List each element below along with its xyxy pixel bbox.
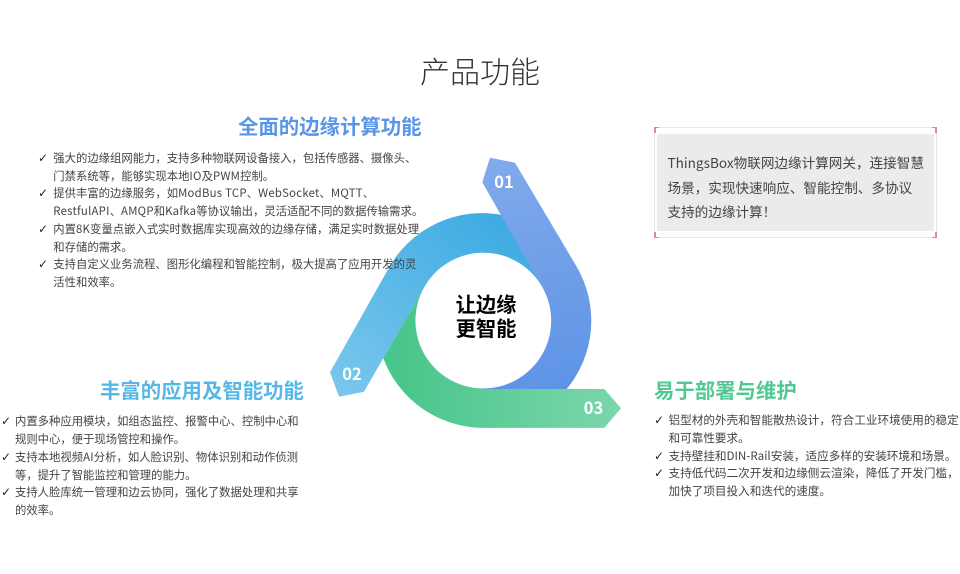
text block: deployment list: ✓ <box>654 466 664 480</box>
center label: 更智能 <box>456 312 516 342</box>
center label <box>456 288 516 342</box>
text block: deployment list: ✓ <box>654 413 664 427</box>
segment 02 <box>330 213 540 397</box>
callout: gateway description: 场景，实现快速响应、智能控制、多协议 <box>668 176 912 196</box>
text block: applications list: 内置多种应用模块，如组态监控、报警中心、控制中心和 <box>15 413 299 429</box>
text block: edge computing list: 强大的边缘组网能力，支持多种物联网设备接入，包括传感器、摄像头、 <box>53 150 416 166</box>
segment 02: 02 <box>342 361 362 385</box>
center label: 让边缘 <box>456 288 516 318</box>
text block: applications list: ✓ <box>1 450 11 464</box>
text block: edge computing list: ✓ <box>38 222 48 236</box>
text block: edge computing list: ✓ <box>38 151 48 165</box>
segment 01: 01 <box>494 169 514 193</box>
text block: applications list: 支持人脸库统一管理和边云协同，强化了数据处理和共享 <box>15 484 299 500</box>
text block: applications list: 等，提升了智能监控和管理的能力。 <box>15 466 196 482</box>
text block: edge computing list: 内置8K变量点嵌入式实时数据库实现高效的边缘存储，满足实时数据处理 <box>53 221 419 237</box>
text block: applications list: ✓ <box>1 485 11 499</box>
segment 03 <box>383 287 621 428</box>
text block: deployment list <box>654 412 959 499</box>
text block: edge computing list: 门禁系统等，能够实现本地IO及PWM控制。 <box>53 168 274 184</box>
text block: deployment list: 支持低代码二次开发和边缘侧云渲染，降低了开发门槛， <box>668 465 959 481</box>
text block: deployment list: 加快了项目投入和迭代的速度。 <box>668 483 831 499</box>
text block: deployment list: ✓ <box>654 449 664 463</box>
callout: gateway description: 支持的边缘计算！ <box>668 201 776 221</box>
text block: edge computing list: 和存储的需求。 <box>53 239 133 255</box>
text block: edge computing list <box>38 150 423 290</box>
text block: edge computing list: 活性和效率。 <box>53 274 121 290</box>
callout: gateway description: ThingsBox物联网边缘计算网关，连接智慧 <box>668 152 924 172</box>
text block: deployment list: 支持壁挂和DIN-Rail安装，适应多样的安装环境和场景。 <box>668 448 956 464</box>
heading: applications: 丰富的应用及智能功能 <box>100 374 304 404</box>
text block: deployment list: 铝型材的外壳和智能散热设计，符合工业环境使用的稳定 <box>668 412 959 428</box>
title: 产品功能 <box>420 48 540 92</box>
segment 03: 03 <box>584 395 603 419</box>
text block: edge computing list: 支持自定义业务流程、图形化编程和智能控制，极大提高了应用开发的灵 <box>53 256 416 272</box>
heading: edge computing: 全面的边缘计算功能 <box>238 110 422 140</box>
text block: applications list: 的效率。 <box>15 502 60 518</box>
text block: applications list: 支持本地视频AI分析，如人脸识别、物体识别和动作侦测 <box>15 449 298 465</box>
text block: applications list: ✓ <box>1 414 11 428</box>
text block: edge computing list: RestfulAPI、AMQP和Kafka等协议输出，灵活适配不同的数据传输需求。 <box>53 203 423 219</box>
heading: deployment: 易于部署与维护 <box>654 374 797 404</box>
text block: deployment list: 和可靠性要求。 <box>668 430 750 446</box>
text block: edge computing list: ✓ <box>38 186 48 200</box>
text block: applications list: 规则中心，便于现场管控和操作。 <box>15 431 185 447</box>
text block: applications list <box>1 413 299 518</box>
text block: edge computing list: 提供丰富的边缘服务，如ModBus TCP、WebSocket、MQTT、 <box>53 185 374 201</box>
callout: gateway description <box>654 127 937 238</box>
segment 01 <box>482 158 591 389</box>
text block: edge computing list: ✓ <box>38 257 48 271</box>
